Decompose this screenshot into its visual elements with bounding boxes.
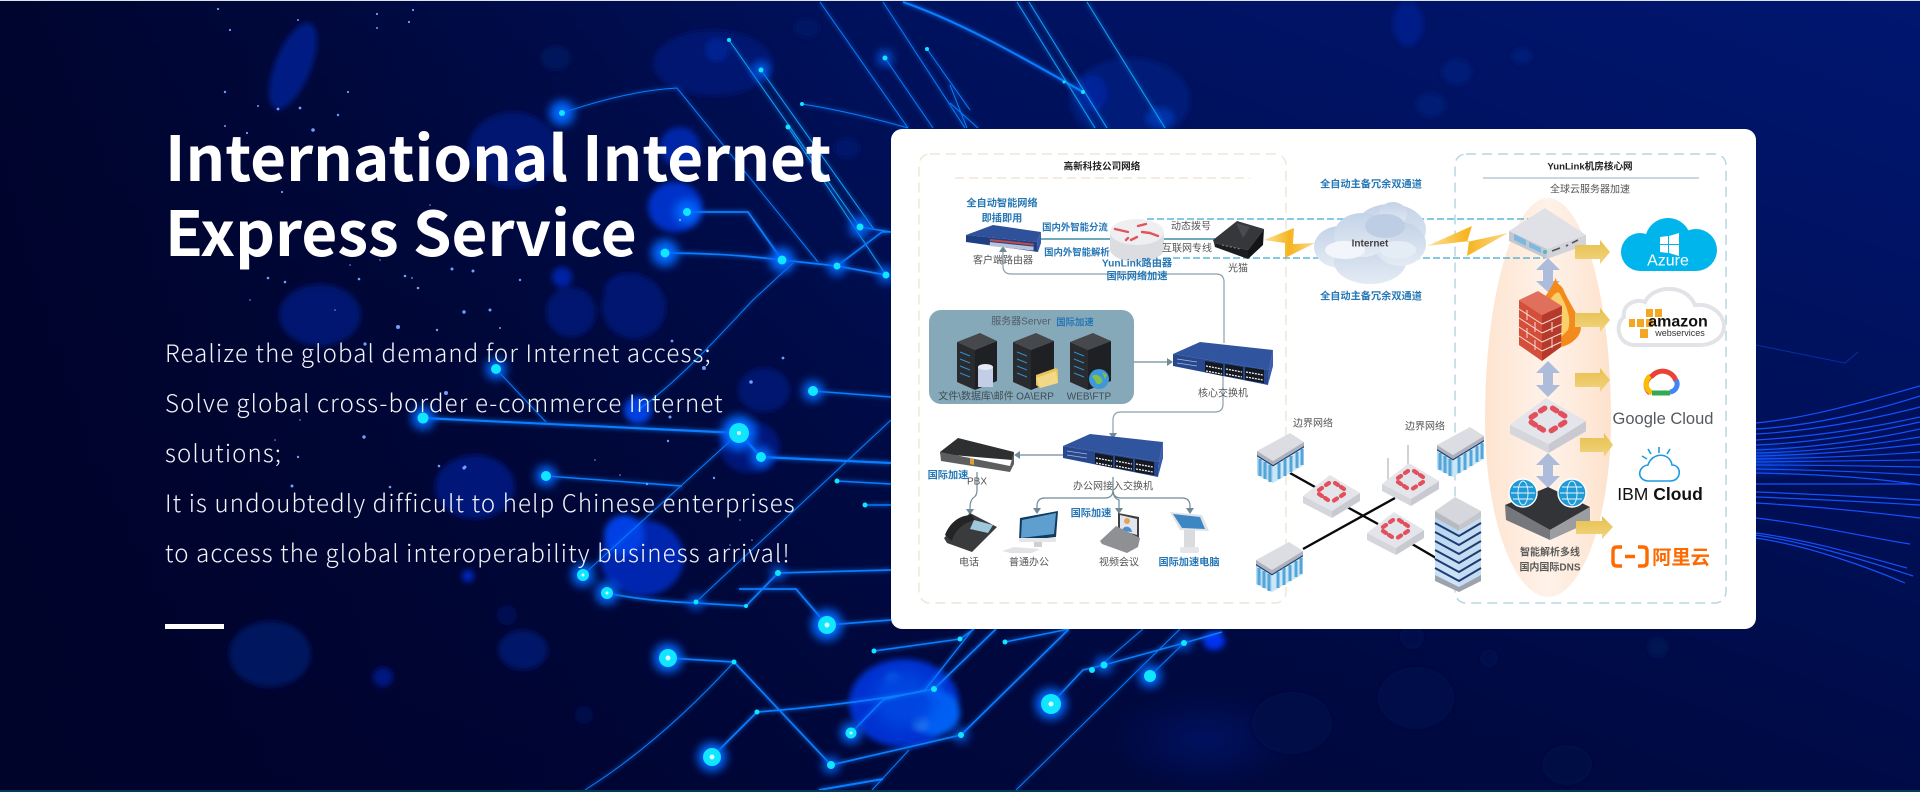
office tower: [1435, 497, 1481, 592]
label: OA ERP: OA\ERP: [1016, 392, 1054, 402]
connectors: [966, 246, 1224, 515]
label: video meeting: 视频会议: [1099, 556, 1139, 568]
logo: Google Cloud: Google Cloud: [1613, 410, 1713, 428]
label: WEB FTP: WEB\FTP: [1067, 392, 1112, 402]
description text: It is undoubtedly difficult to help Chinese enterprises: [165, 484, 796, 519]
label: border network left: 边界网络: [1293, 416, 1333, 430]
top edge line: [0, 0, 1920, 1]
label: redundant channel bottom: 全自动主备冗余双通道: [1320, 290, 1422, 302]
label: auto smart network: [966, 196, 1038, 224]
label: DNS: 智能解析多线: [1520, 546, 1580, 558]
description text: solutions;: [165, 434, 282, 469]
firewall box 1: [1303, 475, 1360, 518]
server towers: [957, 333, 1111, 390]
label: auto smart network: 即插即用: [982, 212, 1022, 224]
lightning bolt left: [1264, 228, 1315, 258]
description text: [165, 334, 796, 569]
label: accelerated PC: 国际加速电脑: [1158, 556, 1220, 568]
icon: desktop computer: [1002, 511, 1058, 553]
device: DNS server with globes: [1505, 479, 1590, 540]
orange egg backdrop: [1485, 198, 1611, 597]
label: border network right: 边界网络: [1405, 420, 1445, 432]
double arrows: [1536, 258, 1560, 488]
label: office PC: 普通办公: [1009, 556, 1049, 568]
link line router to modem: [1041, 238, 1215, 240]
description text: Solve global cross-border e-commerce Internet: [165, 384, 724, 419]
building top left: [1257, 433, 1304, 483]
device: gateway server: [1509, 208, 1586, 259]
label: auto smart network: 全自动智能网络: [966, 196, 1038, 210]
logo: IBM Cloud: [1617, 447, 1703, 504]
label: smart split: 国内外智能分流: [1042, 222, 1108, 232]
device: optical modem: [1213, 221, 1264, 259]
lightning bolt right: [1427, 226, 1508, 256]
icon: database cylinder: [978, 364, 993, 387]
icon: folder: [1036, 368, 1058, 388]
device: PBX: [940, 438, 1014, 472]
label: office switch: 办公网接入交换机: [1073, 480, 1153, 492]
logo: Google Cloud: [1613, 371, 1713, 428]
logo: AWS: amazon: [1648, 314, 1708, 330]
background: star particles: [217, 8, 784, 546]
logo: Azure: Azure: [1647, 252, 1689, 270]
device: YunLink router: [1110, 219, 1164, 262]
core network zone: 全球云服务器加速: [1550, 182, 1630, 196]
label: smart resolve: 国内外智能解析: [1044, 246, 1110, 258]
label: file database mail: 文件\数据库\邮件: [938, 390, 1014, 402]
building bottom left: [1256, 542, 1303, 592]
label: DNS: 国内国际DNS: [1519, 560, 1581, 574]
icon: phone: [944, 513, 997, 552]
firewall box 3: [1367, 512, 1424, 555]
label: modem: 光猫: [1228, 262, 1248, 274]
background: circuit lines: [423, 2, 1222, 790]
gold arrows: [1575, 240, 1613, 539]
firewall box 2 with antennas: [1382, 445, 1439, 506]
title: [165, 109, 831, 274]
label: DNS: [1519, 546, 1581, 574]
icon: kiosk terminal: [1170, 512, 1209, 553]
icon: video conferencing unit: [1100, 513, 1140, 553]
label: acceleration video: 国际加速: [1071, 506, 1111, 520]
device: firewall appliance: [1510, 398, 1586, 453]
description text: Realize the global demand for Internet access;: [165, 334, 712, 369]
label: PBX: PBX: [967, 476, 987, 488]
title: International Internet: [165, 109, 831, 199]
logo: Aliyun: [1613, 542, 1710, 570]
logo: Azure: [1621, 218, 1717, 271]
title: Express Service: [165, 184, 637, 274]
company network zone: 高新科技公司网络: [1064, 160, 1141, 172]
device: core switch: [1173, 342, 1273, 385]
device: customer router: [966, 225, 1041, 252]
logo: Aliyun: 阿里云: [1652, 542, 1710, 570]
panel: diagram card: [891, 129, 1756, 629]
label: YunLink router: YunLink路由器: [1102, 256, 1173, 270]
server panel: 国际加速: [1056, 316, 1094, 328]
icon: firewall with flames: [1519, 278, 1581, 361]
dual channel dashed links: [1147, 219, 1545, 258]
label: dedicated line: 互联网专线: [1162, 242, 1212, 254]
accent bar: [165, 624, 224, 629]
core network zone: [1455, 154, 1726, 603]
server panel: [929, 310, 1134, 404]
background: right light rays: [1756, 345, 1920, 583]
server panel: 服务器Server: [991, 314, 1051, 328]
label: redundant channel top: 全自动主备冗余双通道: [1320, 178, 1422, 190]
building top right: [1437, 427, 1484, 477]
label: dynamic dialing: 动态拨号: [1171, 220, 1211, 232]
internet cloud: Internet: [1352, 238, 1389, 250]
logo: AWS: [1619, 289, 1724, 345]
label: acceleration PBX: 国际加速: [928, 468, 968, 482]
logo: IBM Cloud: IBM Cloud: [1617, 484, 1703, 504]
label: YunLink router: [1102, 256, 1173, 282]
logo: AWS: webservices: [1654, 328, 1705, 338]
background: glowing nodes: [414, 38, 1189, 771]
label: YunLink router: 国际网络加速: [1106, 270, 1168, 282]
core network zone: YunLink机房核心网: [1547, 160, 1633, 172]
label: core switch: 核心交换机: [1198, 386, 1248, 400]
description text: to access the global interoperability business arrival!: [165, 534, 791, 569]
company network zone: [919, 154, 1286, 603]
device: office switch: [1063, 434, 1163, 477]
label: customer router: 客户端路由器: [973, 254, 1033, 266]
icon: globe: [1089, 369, 1109, 389]
black border network links: [1290, 473, 1436, 558]
label: phone: 电话: [959, 556, 979, 568]
internet cloud: [1314, 202, 1426, 284]
bottom edge line: [0, 790, 1920, 792]
